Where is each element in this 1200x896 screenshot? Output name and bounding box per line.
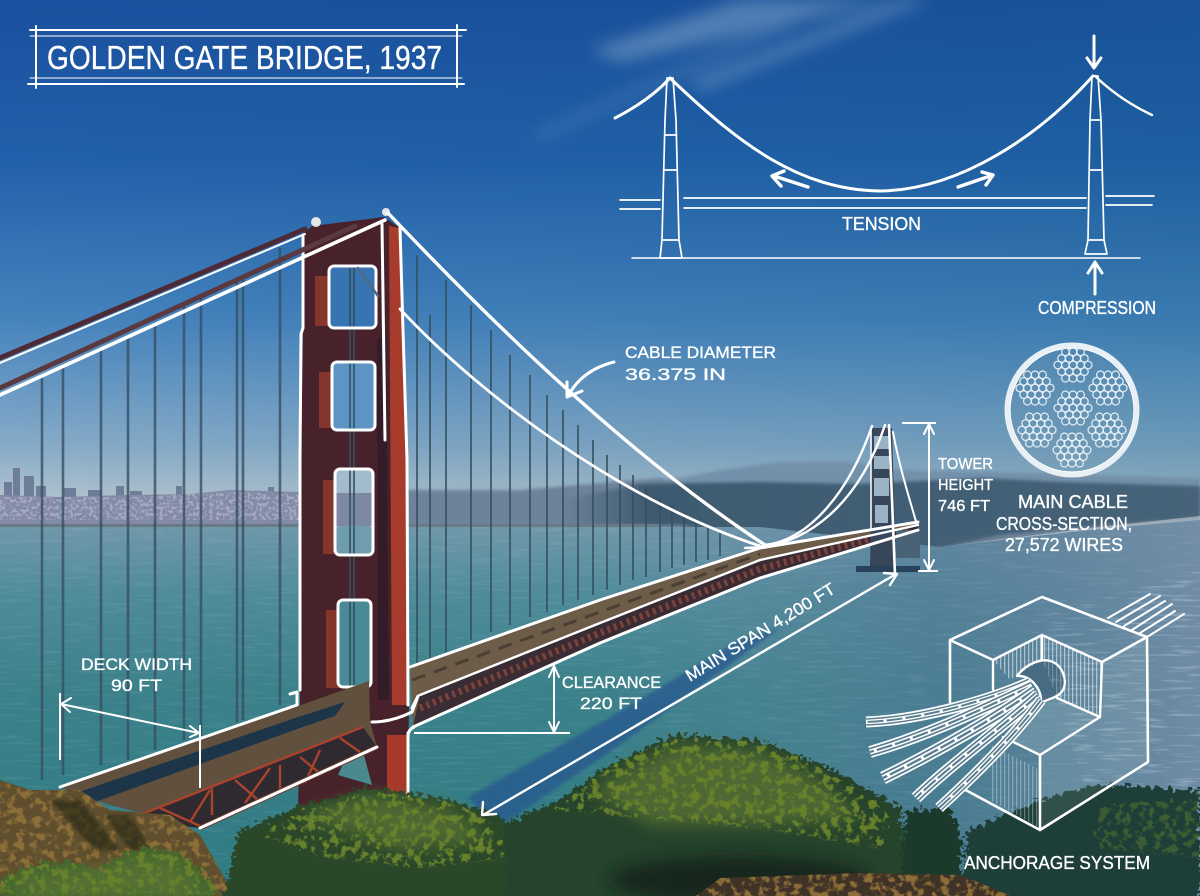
strand 1 bbox=[866, 682, 1030, 722]
far tower white lines bbox=[745, 425, 917, 575]
ground dirt texture bbox=[696, 873, 1012, 896]
hill shadow bbox=[50, 800, 150, 850]
deck width dimension bbox=[60, 655, 200, 788]
water right tint bbox=[0, 520, 1200, 896]
sun rays bbox=[530, 0, 930, 140]
road shadow bbox=[76, 702, 345, 802]
suspender cables left of tower bbox=[42, 248, 280, 780]
tower height dimension: TOWER bbox=[938, 456, 993, 473]
central bush bbox=[505, 735, 915, 896]
bush behind main tower bbox=[215, 787, 524, 896]
sketch deck bbox=[620, 196, 1154, 258]
tower height dimension bbox=[902, 423, 993, 571]
anchor recess bbox=[993, 635, 1102, 755]
main span dimension: MAIN SPAN 4,200 FT bbox=[682, 579, 839, 685]
deck width dimension: 90 FT bbox=[111, 676, 162, 695]
cross-section label: 27,572 WIRES bbox=[1005, 535, 1123, 555]
sketch towers bbox=[660, 76, 1107, 258]
left brown hill bbox=[0, 780, 235, 896]
bush highlights bbox=[0, 740, 1200, 896]
main tower bbox=[298, 217, 409, 812]
truss members bbox=[127, 727, 377, 828]
small bush bbox=[900, 808, 962, 896]
cable collar bbox=[1017, 660, 1065, 703]
cross-section label: MAIN CABLE bbox=[1018, 492, 1128, 512]
cable diameter callout bbox=[567, 343, 776, 397]
water ripple texture bbox=[0, 520, 1200, 896]
water bbox=[0, 520, 1200, 896]
tower height dimension: HEIGHT bbox=[938, 477, 993, 494]
shadow of the bridge on water bbox=[468, 628, 780, 830]
pulling wires bbox=[1108, 594, 1184, 637]
road markings bbox=[412, 554, 760, 680]
anchor block bbox=[950, 597, 1148, 830]
compression arrow bottom bbox=[1088, 262, 1102, 294]
deck left of tower bbox=[60, 681, 377, 828]
tower windows bbox=[329, 266, 376, 687]
right bush bbox=[960, 784, 1200, 896]
tower outlines bbox=[300, 224, 408, 796]
strand 2 bbox=[870, 686, 1032, 752]
hill dirt texture bbox=[0, 780, 235, 896]
tower top caps bbox=[311, 208, 390, 227]
clearance dimension: CLEARANCE bbox=[562, 673, 661, 692]
red lower right leg bbox=[387, 735, 408, 800]
olive underlay glow bbox=[20, 745, 860, 896]
deck right of tower bbox=[410, 522, 918, 727]
window suspenders bbox=[350, 266, 354, 687]
tension label: TENSION bbox=[842, 214, 921, 234]
main cable cross-section bbox=[1007, 345, 1137, 475]
truss right of tower bbox=[413, 525, 918, 727]
clearance dimension bbox=[414, 666, 661, 733]
tower gap under the deck bbox=[338, 745, 372, 785]
city skyline bbox=[0, 468, 660, 527]
sketch cable bbox=[615, 76, 1152, 191]
main span dimension bbox=[482, 573, 897, 815]
truss band bbox=[127, 727, 377, 828]
truss red speckle bbox=[420, 528, 910, 708]
shadow strip on right leg bbox=[377, 335, 389, 700]
anchor block shading bbox=[990, 635, 1148, 830]
compression arrow top bbox=[1087, 36, 1101, 68]
tower height dimension: 746 FT bbox=[938, 498, 990, 515]
cable diameter callout: CABLE DIAMETER bbox=[625, 343, 776, 362]
cable strands bbox=[866, 682, 1041, 808]
cross-section label bbox=[996, 492, 1132, 555]
bridge deck bbox=[60, 522, 918, 828]
tension arrows bbox=[772, 171, 993, 187]
deck width dimension: DECK WIDTH bbox=[81, 655, 192, 674]
lower green shrubs bbox=[0, 848, 222, 896]
compression label: COMPRESSION bbox=[1038, 298, 1156, 318]
dark ground shadow bbox=[610, 856, 870, 896]
strand 4 bbox=[916, 695, 1038, 798]
deck white outlines bbox=[60, 522, 918, 828]
cable diameter callout: 36.375 IN bbox=[625, 365, 726, 384]
sparkling water at right bbox=[1030, 570, 1200, 800]
anchorage system sketch bbox=[866, 594, 1184, 830]
red right leg bbox=[389, 226, 408, 705]
foliage and hillside bbox=[0, 735, 1200, 896]
sky background bbox=[0, 0, 1200, 530]
strand 5 bbox=[939, 700, 1041, 808]
red left legs bbox=[315, 276, 339, 688]
distant hills bbox=[300, 462, 1200, 560]
brown ground bbox=[696, 873, 1012, 896]
title: GOLDEN GATE BRIDGE, 1937 bbox=[47, 39, 442, 76]
cross-section label: CROSS-SECTION, bbox=[996, 514, 1132, 534]
strand 3 bbox=[883, 690, 1035, 778]
far tower bbox=[745, 425, 920, 575]
main cables bbox=[0, 213, 765, 546]
diagram: tension and compression bbox=[615, 36, 1156, 318]
anchorage label: ANCHORAGE SYSTEM bbox=[964, 853, 1150, 873]
clearance dimension: 220 FT bbox=[580, 694, 642, 713]
suspender cables right of tower bbox=[351, 255, 720, 690]
